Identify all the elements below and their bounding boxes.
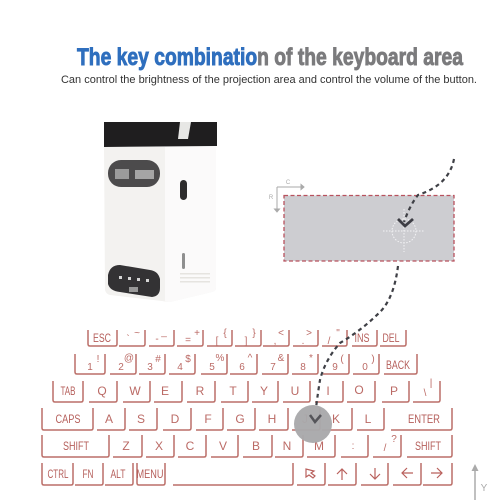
row 2 keys: 7	[270, 362, 276, 373]
row 4 keys: D	[171, 412, 180, 426]
row 1 keys: }	[252, 328, 256, 339]
row 2 keys: #	[155, 354, 161, 365]
row 5 keys: ?	[391, 434, 397, 445]
row 1 keys: ESC	[93, 331, 111, 345]
row 2 keys: 4	[177, 362, 183, 373]
row 3 keys: W	[129, 384, 141, 398]
row 1 keys: INS	[354, 331, 370, 345]
row 5 keys: M	[314, 439, 324, 453]
row 2 keys: %	[216, 353, 225, 364]
crosshair target	[383, 209, 424, 252]
row 2 keys: 1	[87, 362, 93, 373]
row 3 keys: U	[291, 384, 299, 398]
front window	[108, 160, 160, 187]
row 2 keys: &	[278, 353, 285, 364]
projection area diagram: C	[286, 180, 291, 186]
device body	[104, 147, 216, 302]
row 1 keys: {	[223, 328, 227, 339]
axis arrows C and R	[274, 184, 304, 212]
row 3 keys: T	[229, 384, 237, 398]
row 1 keys: "	[336, 328, 340, 339]
row 1 keys: =	[185, 335, 191, 346]
row 6 keys: MENU	[136, 467, 164, 481]
row 2 keys: $	[185, 354, 191, 365]
row 2 keys: 8	[300, 362, 306, 373]
row 2 keys: 6	[239, 362, 245, 373]
Y axis arrow	[472, 464, 488, 500]
device black top	[104, 122, 217, 147]
row 5 keys	[42, 434, 452, 457]
row 3 keys: E	[161, 384, 169, 398]
row 4 keys: S	[137, 412, 145, 426]
row 6 keys	[42, 463, 452, 485]
row 2 keys: @	[124, 353, 134, 364]
side small slot	[182, 253, 185, 269]
row 2 keys: *	[309, 353, 313, 364]
cursor mark	[398, 219, 413, 226]
row 1 keys: <	[278, 328, 284, 339]
row 3 keys: P	[390, 384, 398, 398]
row 6 keys: CTRL	[48, 467, 69, 481]
row 1 keys: ,	[274, 336, 276, 347]
row 5 keys: B	[252, 439, 260, 453]
row 3 keys: I	[326, 384, 330, 398]
gray touch circle	[294, 405, 332, 443]
projection area diagram: R	[269, 195, 274, 201]
dashed path bottom	[316, 266, 398, 408]
Y axis arrow: Y	[481, 483, 488, 494]
row 5 keys: SHIFT	[63, 439, 89, 453]
subtitle text: Can control the brightness of the projection area and control the volume of the button.	[61, 74, 477, 86]
row 1 keys: ]	[245, 336, 248, 347]
row 4 keys: ENTER	[408, 412, 440, 426]
row 3 keys	[53, 378, 440, 402]
row 1 keys: _	[160, 327, 167, 338]
row 4 keys: A	[105, 412, 113, 426]
row 1 keys	[88, 327, 406, 347]
row 1 keys: DEL	[382, 331, 400, 345]
speaker grille	[180, 273, 210, 282]
row 1 keys: .	[302, 336, 304, 347]
row 5 keys: Z	[122, 439, 130, 453]
row 4 keys: CAPS	[56, 412, 80, 426]
keyboard	[42, 327, 452, 485]
cursor mark in circle	[310, 415, 321, 422]
row 5 keys: N	[283, 439, 291, 453]
row 1 keys: ~	[134, 328, 140, 339]
row 2 keys: )	[371, 354, 375, 365]
row 4 keys: J	[302, 412, 308, 426]
row 3 keys: |	[430, 378, 432, 389]
row 2 keys: ^	[248, 353, 253, 364]
dashed path top	[404, 159, 454, 222]
row 3 keys: \	[424, 388, 427, 399]
row 2 keys: BACK	[386, 358, 410, 372]
row 6 keys: FN	[82, 467, 94, 481]
row 4 keys: L	[365, 412, 372, 426]
row 3 keys: R	[196, 384, 205, 398]
row 1 keys: /	[328, 336, 331, 347]
row 1 keys: +	[194, 328, 200, 339]
row 2 keys	[75, 353, 417, 374]
row 3 keys: O	[354, 383, 364, 397]
row 2 keys: (	[340, 354, 344, 365]
row 4 keys: F	[204, 412, 212, 426]
row 5 keys: :	[352, 441, 354, 452]
row 2 keys: !	[97, 354, 99, 365]
row 2 keys: 2	[118, 362, 124, 373]
row 5 keys: SHIFT	[415, 439, 441, 453]
row 2 keys: 9	[332, 362, 338, 373]
row 1 keys: >	[306, 328, 312, 339]
row 6 keys: ALT	[110, 467, 126, 481]
row 2 keys: 3	[147, 362, 153, 373]
row 2 keys: 5	[209, 362, 215, 373]
side slot	[180, 180, 187, 200]
row 3 keys: Y	[260, 384, 268, 398]
row 5 keys: /	[384, 443, 387, 454]
projection area diagram	[269, 180, 454, 261]
row 5 keys: X	[155, 439, 163, 453]
row 5 keys: C	[186, 439, 195, 453]
front button panel	[108, 265, 160, 297]
row 4 keys	[42, 408, 452, 430]
row 1 keys: -	[155, 334, 159, 345]
row 1 keys: [	[216, 336, 219, 347]
row 4 keys: K	[332, 412, 340, 426]
row 4 keys: H	[268, 412, 276, 426]
device: projection keyboard	[104, 122, 217, 302]
row 5 keys: V	[219, 439, 227, 453]
row 3 keys: TAB	[60, 384, 76, 398]
row 3 keys: Q	[97, 384, 107, 398]
row 4 keys: G	[235, 412, 245, 426]
projection rectangle	[284, 196, 454, 261]
row 1 keys: `	[126, 333, 130, 345]
arrow key glyphs	[306, 468, 442, 480]
row 2 keys: 0	[362, 362, 368, 373]
